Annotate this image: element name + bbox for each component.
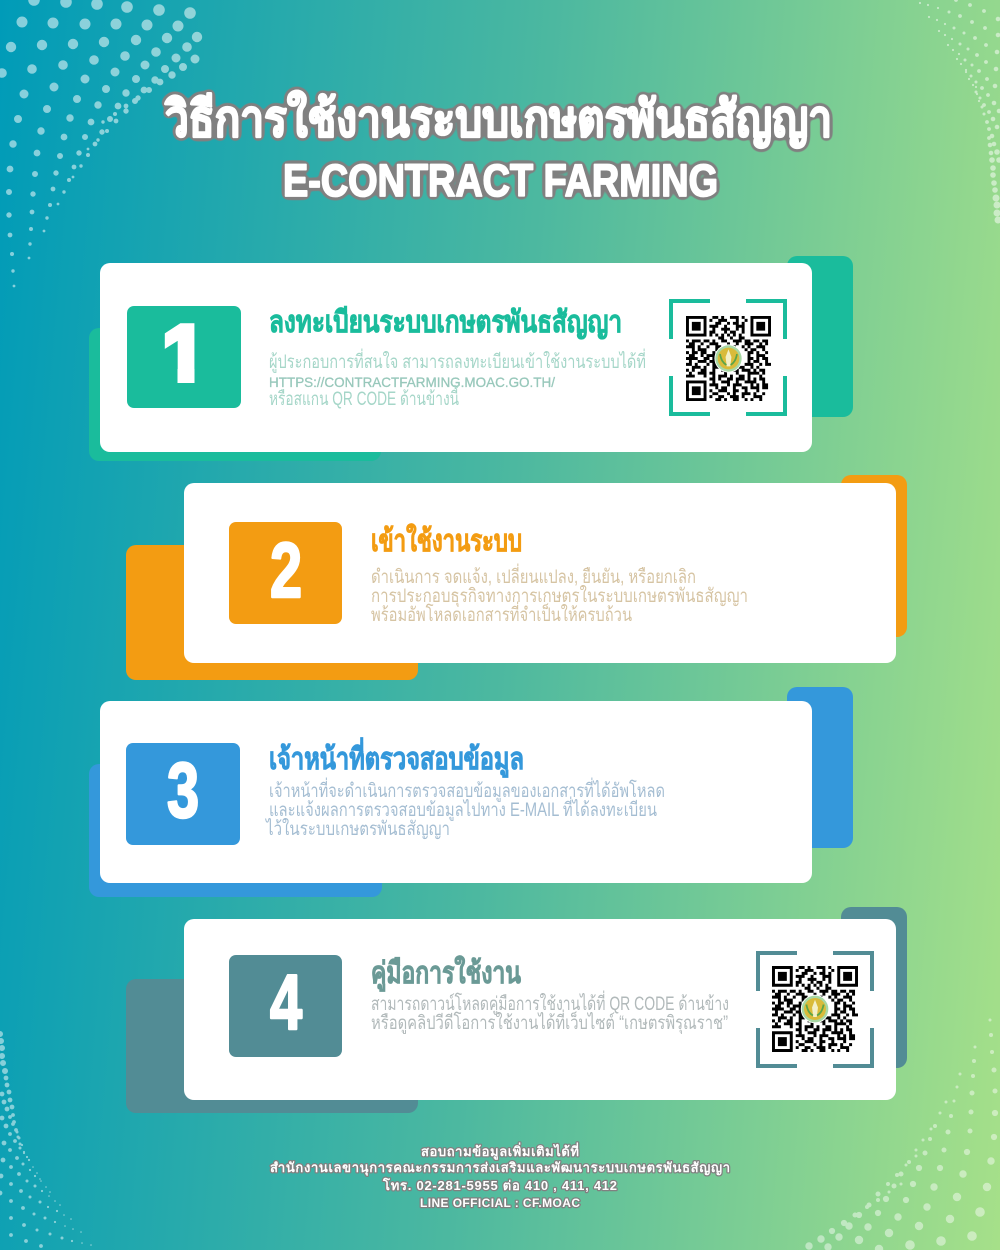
decorative dots: top-left corner	[2, 0, 197, 286]
step 1 description: HTTPS://CONTRACTFARMING.MOAC.GO.TH/	[269, 374, 555, 390]
footer contact text: สอบถามข้อมูลเพิ่มเติมได้ที่	[421, 1142, 579, 1160]
white card	[100, 263, 812, 452]
step 1 description: หรือสแกน QR CODE ด้านข้างนี้	[269, 385, 459, 410]
footer contact text: สำนักงานเลขานุการคณะกรรมการส่งเสริมและพัฒนาระบบเกษตรพันธสัญญา	[270, 1160, 730, 1176]
footer contact text: โทร. 02-281-5955 ต่อ 410 , 411, 412	[382, 1177, 617, 1193]
step 4 description	[371, 990, 729, 1035]
QR code 1 with frame	[671, 301, 785, 414]
step 1 heading: ลงทะเบียนระบบเกษตรพันธสัญญา	[269, 306, 622, 340]
step 4 description: หรือดูคลิปวีดีโอการใช้งานได้ที่เว็บไซต์ “เกษตรพิรุณราช”	[371, 1009, 728, 1035]
step 3 description	[264, 777, 665, 840]
back block left	[89, 328, 381, 461]
QR code 2 with frame	[758, 953, 872, 1066]
step 4 heading: คู่มือการใช้งาน	[371, 955, 521, 992]
number badge 3: 3	[167, 747, 199, 834]
panel: step 3	[89, 687, 853, 897]
number badge 1: 1	[162, 309, 206, 397]
number badge 3	[126, 743, 240, 845]
step 2 heading: เข้าใช้งานระบบ	[371, 523, 522, 558]
back block right	[841, 475, 907, 637]
step 2 description: การประกอบธุรกิจทางการเกษตรในระบบเกษตรพันธสัญญา	[371, 585, 748, 608]
footer contact text: LINE OFFICIAL : CF.MOAC	[420, 1196, 580, 1210]
step 2 description: ดำเนินการ จดแจ้ง, เปลี่ยนแปลง, ยืนยัน, หรือยกเลิก	[371, 563, 696, 588]
panel: step 1	[89, 256, 853, 461]
white card	[184, 919, 896, 1100]
panel: step 4	[126, 907, 907, 1113]
number badge 1	[127, 306, 241, 408]
step 2 description: พร้อมอัพโหลดเอกสารที่จำเป็นให้ครบถ้วน	[371, 601, 632, 626]
number badge 4: 4	[270, 959, 302, 1046]
white card	[184, 483, 896, 663]
back block right	[841, 907, 907, 1068]
number badge 2: 2	[270, 527, 302, 614]
back block right	[787, 687, 853, 848]
step 3 description: และแจ้งผลการตรวจสอบข้อมูลไปทาง E-MAIL ที่ได้ลงทะเบียน	[269, 796, 657, 821]
title line 2: E-Contract Farming: E-CONTRACT FARMING	[283, 155, 718, 206]
back block left	[126, 979, 418, 1113]
back block right	[787, 256, 853, 417]
number badge 4	[229, 955, 342, 1057]
white card	[100, 701, 812, 883]
panel: step 2	[126, 475, 907, 680]
step 3 heading: เจ้าหน้าที่ตรวจสอบข้อมูล	[269, 737, 524, 778]
title line 1: Thai: วิธีการใช้งานระบบเกษตรพันธสัญญา	[164, 90, 832, 148]
back block left	[89, 764, 382, 897]
step 4 description: สามารถดาวน์โหลดคู่มือการใช้งานได้ที่ QR CODE ด้านข้าง	[371, 990, 729, 1015]
step 1 description: ผู้ประกอบการที่สนใจ สามารถลงทะเบียนเข้าใช้งานระบบได้ที่	[269, 348, 646, 373]
step 2 description	[371, 563, 748, 626]
title	[164, 90, 832, 206]
decorative dots: top-right corner	[920, 0, 999, 220]
number badge 2	[229, 522, 342, 624]
back block left	[126, 545, 418, 680]
step 3 description: เจ้าหน้าที่จะดำเนินการตรวจสอบข้อมูลของเอกสารที่ได้อัพโหลด	[269, 777, 665, 802]
footer contact text	[270, 1142, 730, 1210]
decorative dots: bottom-right corner	[809, 1020, 995, 1249]
step 3 description: ไว้ในระบบเกษตรพันธสัญญา	[264, 818, 450, 840]
decorative dots: bottom-left corner	[0, 1034, 91, 1246]
step 1 description	[269, 348, 646, 410]
